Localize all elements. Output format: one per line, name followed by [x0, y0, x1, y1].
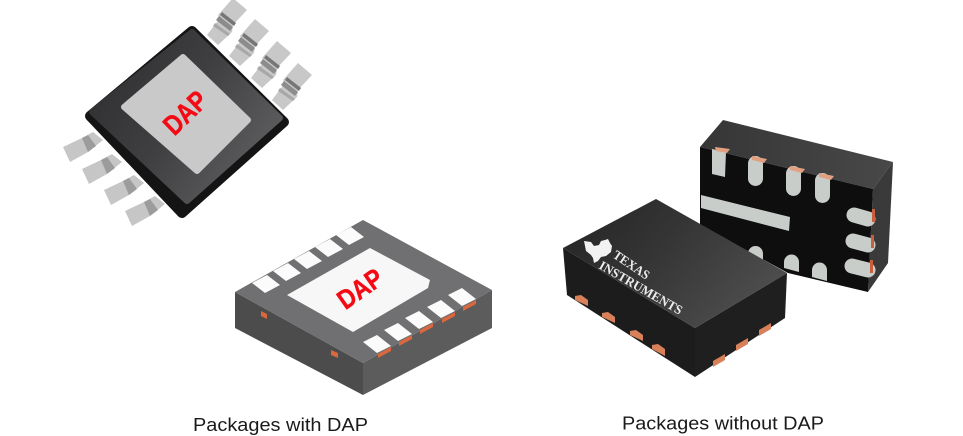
chip: QFN package with DAP [235, 220, 492, 395]
solder edges [715, 147, 834, 180]
pads: upper left [252, 227, 364, 293]
body top face [92, 32, 280, 201]
left side [235, 292, 363, 395]
pads: top row [712, 149, 830, 203]
chip: SOIC package with DAP [63, 0, 312, 226]
right side [363, 290, 492, 395]
chip: rear view without DAP [700, 120, 893, 292]
label: DAP: DAP [332, 263, 389, 315]
left side [563, 248, 695, 377]
right side [695, 273, 787, 377]
right side [868, 162, 893, 292]
top face [700, 120, 893, 189]
body side [90, 31, 284, 213]
logo: wordmark: INSTRUMENTS [596, 258, 685, 318]
logo: wordmark: TEXAS [610, 247, 653, 282]
caption: packages without DAP: Packages without DAP [622, 412, 824, 434]
top face [235, 220, 492, 363]
chip: top view with Texas Instruments logo [563, 199, 787, 377]
solder pads [575, 295, 771, 367]
pads: bottom row [748, 246, 827, 281]
center bar [701, 195, 790, 231]
caption: packages with DAP: Packages with DAP [193, 414, 368, 435]
pads: right column [852, 215, 868, 270]
exposed pad [287, 248, 430, 332]
label: DAP: DAP [157, 85, 214, 141]
leads: upper right [207, 0, 312, 110]
top face [563, 199, 787, 328]
leads: lower left [63, 132, 165, 226]
solder edges [261, 300, 476, 358]
underside [700, 147, 873, 292]
pads: lower right [363, 288, 476, 353]
logo: TI mark [584, 239, 612, 263]
exposed pad [124, 57, 248, 171]
